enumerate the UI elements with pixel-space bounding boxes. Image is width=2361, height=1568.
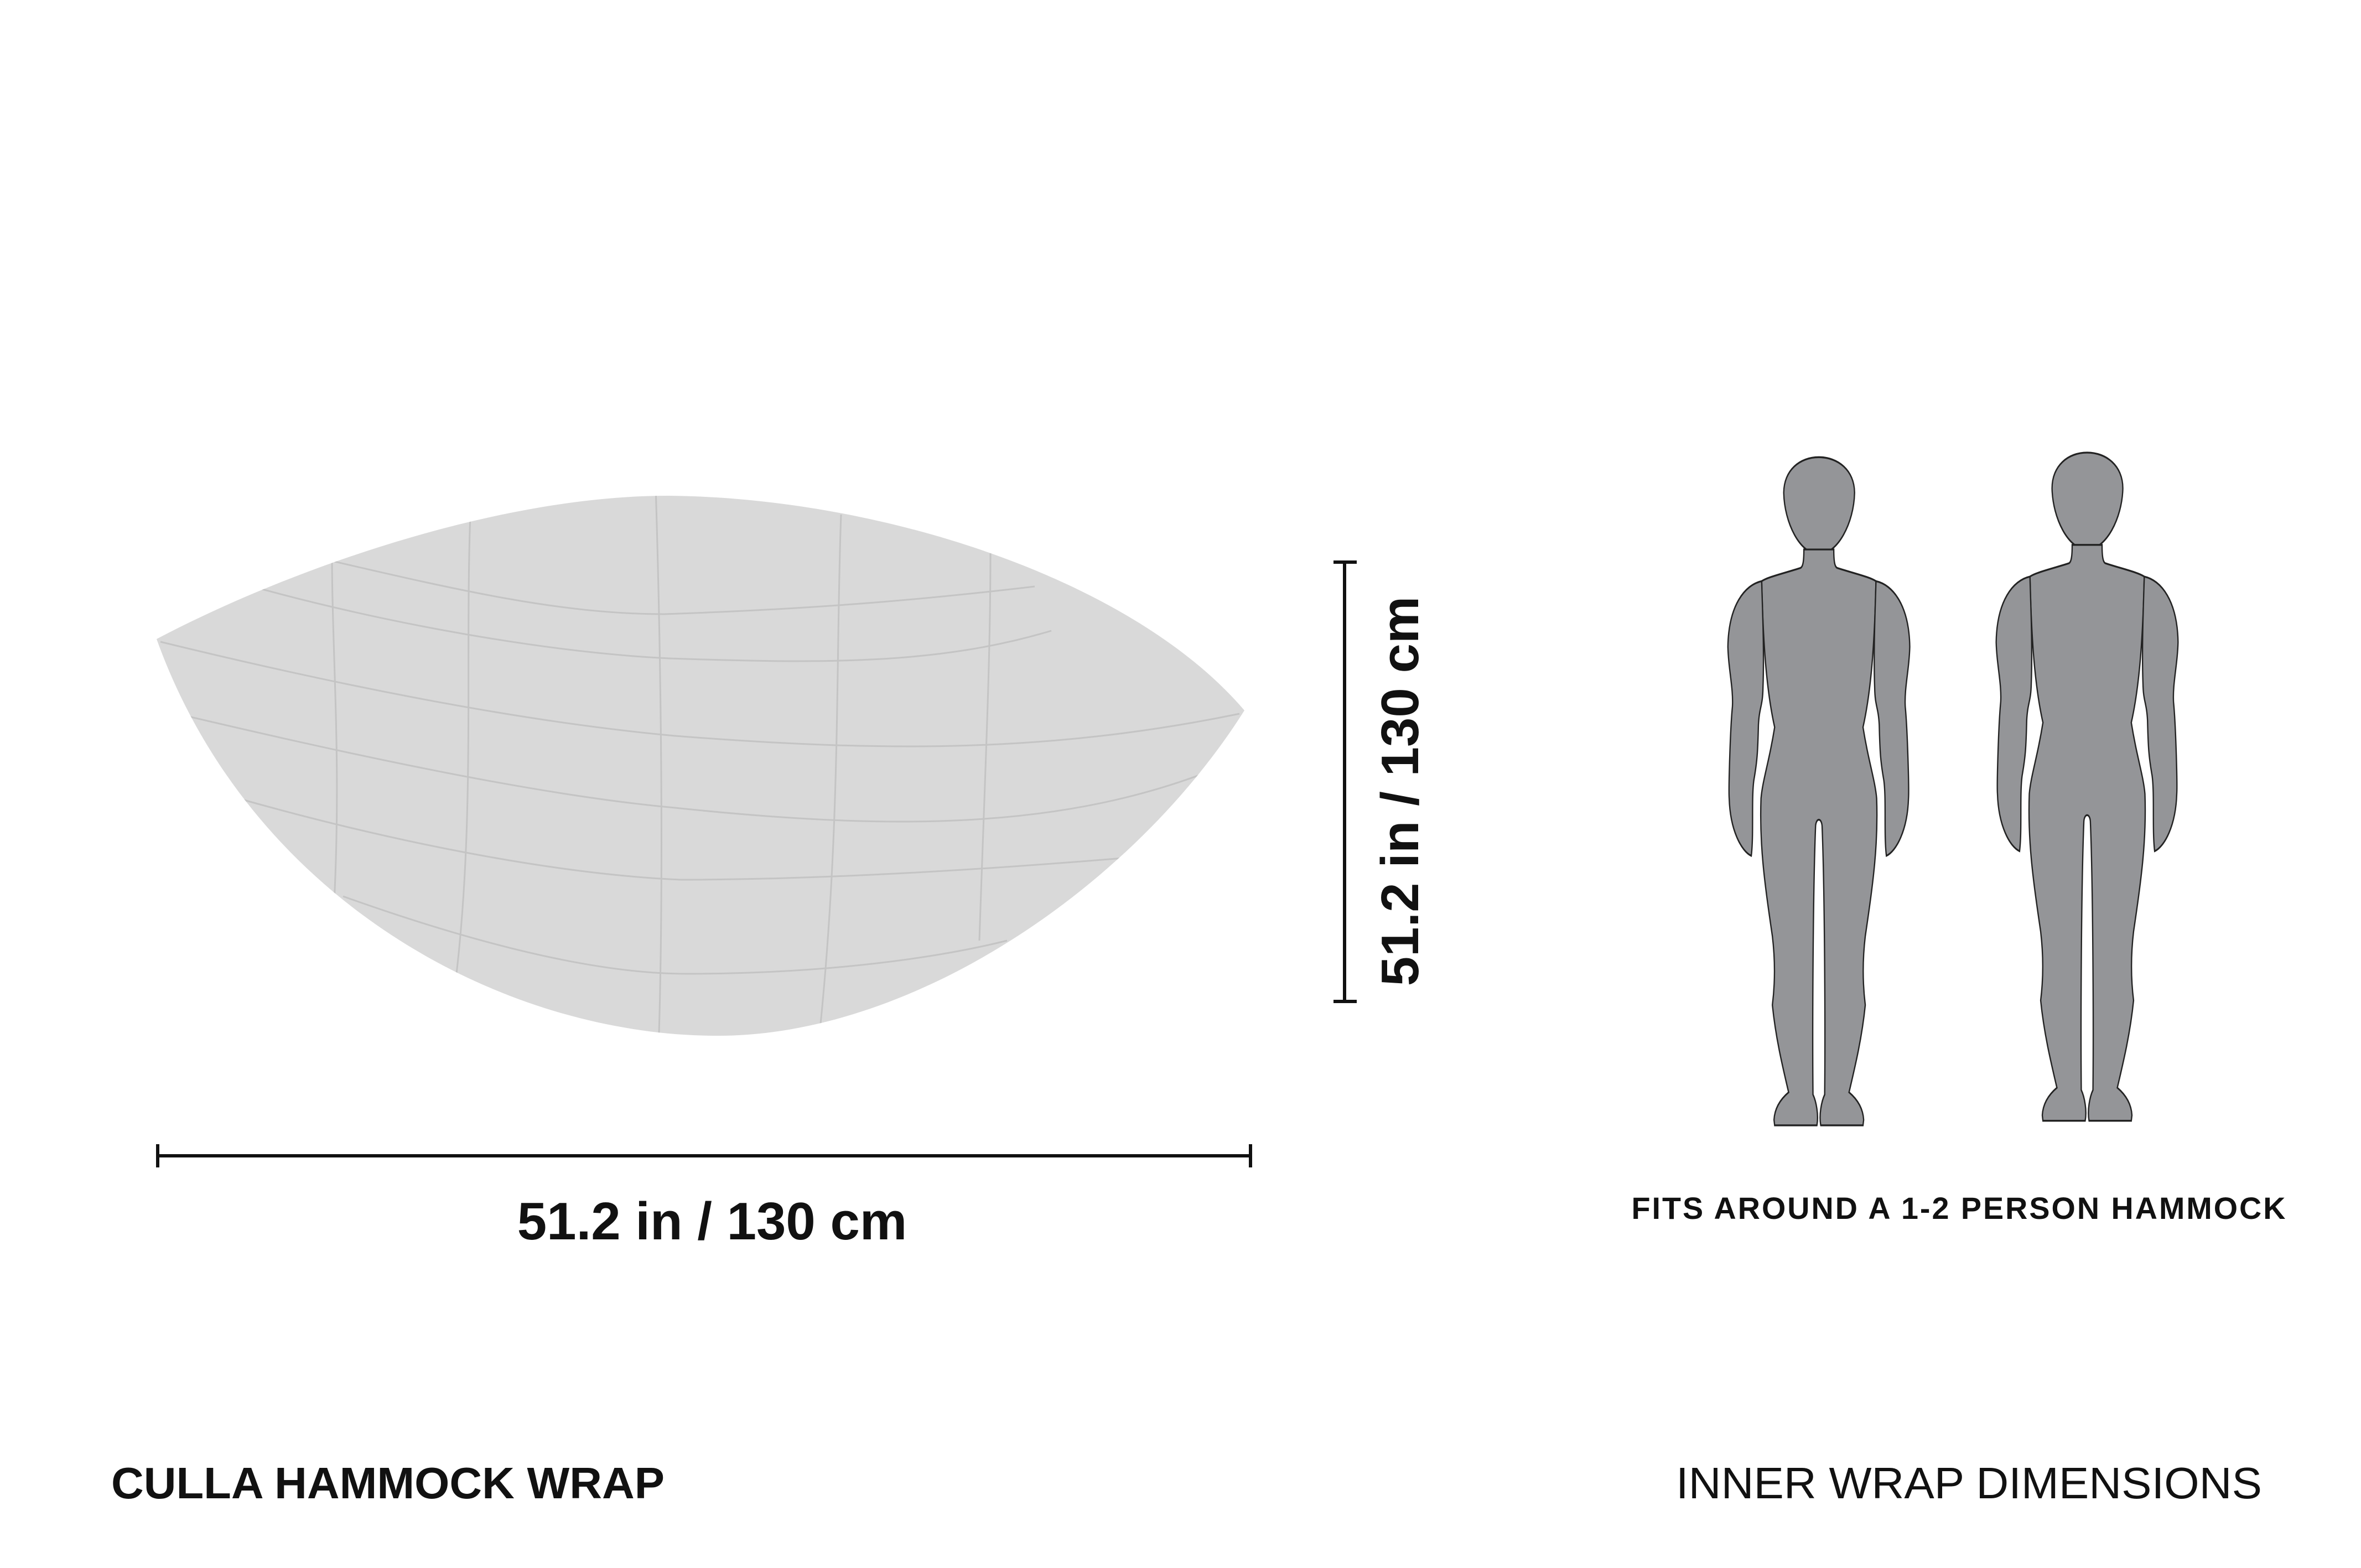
person 1 [1728, 457, 1910, 1125]
width label: 51.2 in / 130 cm [517, 1192, 907, 1251]
fits caption: FITS AROUND A 1-2 PERSON HAMMOCK [1631, 1191, 2287, 1226]
title: culla hammock wrap: CULLA HAMMOCK WRAP [111, 1458, 665, 1508]
vertical dimension line [1333, 561, 1357, 1003]
horizontal dimension line [157, 1144, 1252, 1167]
figures: two persons [1728, 453, 2178, 1125]
hammock wrap shape [157, 487, 1244, 1051]
person 2 [1996, 453, 2178, 1121]
height label: 51.2 in / 130 cm [1371, 596, 1430, 986]
title: inner wrap dimensions: INNER WRAP DIMENSIONS [1676, 1458, 2262, 1508]
